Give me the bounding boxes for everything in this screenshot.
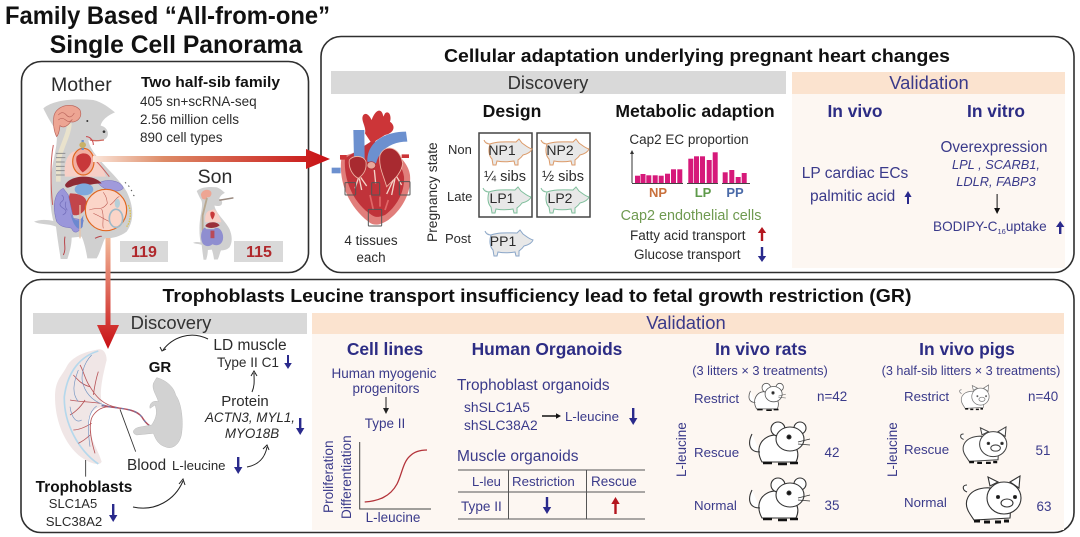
column: in vitro: BODIPY-C: [933, 219, 997, 234]
text block: protein: Protein: [221, 393, 269, 410]
column: in vivo pigs: n=40: [1028, 389, 1058, 404]
chart: proliferation curve: Proliferation: [321, 440, 336, 513]
text block: family stats: 890 cell types: [140, 130, 223, 145]
column: in vivo pigs: 51: [1036, 443, 1050, 458]
heading: design: Design: [483, 101, 541, 121]
chart: pregnancy design: Pregnancy state: [425, 142, 440, 242]
column: in vivo rats: n=42: [817, 389, 847, 404]
table: muscle organoids: Rescue: [591, 474, 637, 489]
header bar: discovery: [33, 312, 307, 334]
column: human organoids: Trophoblast organoids: [457, 377, 610, 394]
column: in vivo rats: 35: [825, 498, 839, 513]
text block: LD muscle: [213, 337, 292, 370]
heading: metabolic adaption: Metabolic adaption: [615, 101, 775, 121]
text block: protein: ACTN3, MYL1,: [204, 410, 295, 425]
icon: restrict pig: [960, 385, 989, 409]
pig: NP1: NP1: [488, 142, 516, 158]
header bar: discovery: [331, 71, 786, 94]
column: in vivo rats: (3 litters × 3 treatments): [692, 363, 828, 378]
pig: LP1: LP1: [490, 190, 515, 206]
column: in vitro: LPL , SCARB1,: [952, 157, 1040, 172]
icon: restrict rat: [749, 383, 786, 410]
column: in vivo: In vivo: [827, 101, 883, 121]
column: in vivo pigs: L-leucine: [885, 422, 900, 477]
chart: pregnancy design: Post: [445, 231, 471, 246]
column: human organoids: L-leucine: [565, 409, 619, 424]
text block: blood L-leucine: Blood: [127, 457, 166, 474]
chart: pregnancy design: Non: [448, 142, 472, 157]
column: in vivo pigs: [882, 339, 1060, 522]
column: cell lines: progenitors: [352, 381, 420, 396]
text block: blood L-leucine: L-leucine: [172, 458, 226, 473]
illustration: placenta and fetus: [55, 349, 182, 477]
panel: validation background: [792, 72, 1065, 268]
text block: blood L-leucine: [127, 457, 242, 474]
column: cell lines: [321, 339, 437, 525]
text block: protein: [204, 393, 304, 441]
column: in vitro: 16: [997, 227, 1006, 236]
badge: son count: 115: [246, 244, 272, 261]
text block: family stats: [140, 75, 280, 145]
column: in vitro: Overexpression: [940, 139, 1048, 156]
text block: trophoblasts: Trophoblasts: [36, 479, 132, 496]
chart: Cap2 EC proportion: NP: [649, 185, 667, 200]
column: in vivo: LP cardiac ECs: [802, 165, 909, 182]
panel: trophoblasts: [21, 280, 1074, 532]
icon: normal pig: [963, 476, 1021, 522]
column: in vivo rats: In vivo rats: [715, 339, 807, 359]
column: in vitro: LDLR, FABP3: [956, 174, 1036, 189]
table: muscle organoids: Restriction: [512, 474, 575, 489]
chart: proliferation curve: [321, 435, 431, 525]
label: tissues: each: [356, 250, 386, 265]
chart: proliferation curve: Differentiation: [339, 435, 354, 519]
title: Family Based “All-from-one”: [5, 3, 330, 30]
text block: Cap2 endothelial cells: Fatty acid transport: [630, 228, 746, 243]
column: in vivo rats: Rescue: [694, 445, 739, 460]
pig: LP2: LP2: [548, 190, 573, 206]
text block: family stats: 405 sn+scRNA-seq: [140, 94, 257, 109]
chart: Cap2 EC proportion: [629, 132, 750, 200]
column: in vivo pigs: (3 half-sib litters × 3 treatments): [882, 364, 1060, 378]
label: quarter sibs: ¼ sibs: [484, 169, 526, 185]
column: human organoids: shSLC38A2: [464, 418, 538, 433]
chart: proliferation curve: L-leucine: [366, 510, 420, 525]
chart: Cap2 EC proportion: LP: [695, 185, 712, 200]
text block: family stats: Two half-sib family: [141, 75, 280, 91]
table: muscle organoids: L-leu: [472, 474, 501, 489]
badge: mother count: [120, 241, 168, 262]
panel: family overview: [22, 62, 308, 272]
icon: rescue rat: [750, 422, 810, 464]
heading: trophoblasts: Trophoblasts Leucine transport insufficiency lead to fetal growth restriction (GR): [162, 286, 912, 306]
label: son: Son: [198, 166, 232, 188]
column: in vitro: In vitro: [967, 101, 1025, 121]
arrow: mother placenta to trophoblast panel: [97, 238, 119, 349]
text block: trophoblasts: SLC38A2: [46, 514, 102, 529]
pig: PP1: PP1: [490, 233, 516, 249]
column: in vivo rats: 42: [825, 445, 839, 460]
pig: NP2: [541, 139, 589, 165]
column: in vivo: [802, 101, 912, 205]
column: in vivo pigs: 63: [1037, 499, 1051, 514]
text block: Cap2 endothelial cells: Cap2 endothelial cells: [621, 208, 761, 224]
label: GR: GR: [149, 359, 171, 376]
text block: family stats: 2.56 million cells: [140, 112, 239, 127]
column: in vitro: [933, 101, 1064, 236]
table: muscle organoids: Type II: [461, 499, 502, 514]
badge: son count: [234, 241, 283, 262]
column: cell lines: Type II: [365, 416, 405, 431]
chart: Cap2 EC proportion: Cap2 EC proportion: [629, 132, 749, 147]
panel: validation background: Validation: [646, 312, 726, 333]
column: human organoids: Muscle organoids: [457, 448, 579, 465]
panel: validation background: [312, 312, 1064, 530]
column: cell lines: Cell lines: [347, 339, 423, 359]
icon: normal rat: [750, 478, 810, 520]
icon: heart: [332, 111, 410, 226]
label: mother: Mother: [51, 74, 112, 96]
label: half sibs: ½ sibs: [542, 169, 584, 185]
column: in vivo: palmitic acid: [810, 188, 895, 205]
arrow: mother heart to cardiac panel: [93, 149, 330, 169]
column: in vivo pigs: Rescue: [904, 442, 949, 457]
column: human organoids: Human Organoids: [472, 339, 622, 359]
pig: PP1: [485, 230, 533, 256]
text block: trophoblasts: [36, 479, 132, 529]
column: in vivo pigs: Restrict: [904, 389, 949, 404]
chart: Cap2 EC proportion: PP: [726, 185, 744, 200]
header bar: discovery: Discovery: [508, 72, 589, 93]
column: in vivo rats: Normal: [694, 498, 737, 513]
pig: LP1: [483, 187, 531, 213]
text block: Cap2 endothelial cells: [621, 208, 766, 262]
heading: cellular adaptation: Cellular adaptation underlying pregnant heart changes: [444, 45, 950, 66]
text block: LD muscle: Type II C1: [217, 355, 279, 370]
label: tissues: [344, 233, 398, 265]
pig: NP2: NP2: [546, 142, 574, 158]
badge: mother count: 119: [131, 244, 157, 261]
panel: cellular adaptation: [321, 36, 1074, 272]
title: Single Cell Panorama: [50, 32, 302, 59]
column: in vivo rats: Restrict: [694, 391, 739, 406]
chart: pregnancy design: Late: [447, 189, 472, 204]
icon: mother pig anatomy: [34, 99, 134, 259]
chart: pregnancy design: [425, 133, 590, 256]
text block: LD muscle: LD muscle: [213, 337, 287, 354]
column: in vivo rats: L-leucine: [674, 422, 689, 477]
table: muscle organoids: [458, 470, 645, 519]
pig: NP1: [484, 139, 532, 165]
column: in vivo pigs: In vivo pigs: [919, 339, 1015, 359]
column: human organoids: [457, 339, 645, 519]
column: human organoids: shSLC1A5: [464, 400, 530, 415]
column: cell lines: Human myogenic: [331, 366, 437, 381]
text block: protein: MYO18B: [225, 426, 279, 441]
icon: rescue pig: [961, 427, 1007, 463]
column: in vitro: uptake: [1006, 219, 1047, 234]
arrows: discovery pathway: [133, 335, 269, 508]
panel: validation background: Validation: [889, 72, 969, 93]
label: tissues: 4 tissues: [344, 233, 398, 248]
column: in vivo rats: [674, 339, 847, 520]
text block: trophoblasts: SLC1A5: [49, 496, 97, 511]
icon: son pig anatomy: [193, 187, 233, 260]
column: in vivo pigs: Normal: [904, 495, 947, 510]
header bar: discovery: Discovery: [131, 312, 212, 333]
text block: Cap2 endothelial cells: Glucose transport: [634, 247, 741, 262]
title: [5, 3, 330, 59]
pig: LP2: [541, 187, 589, 213]
